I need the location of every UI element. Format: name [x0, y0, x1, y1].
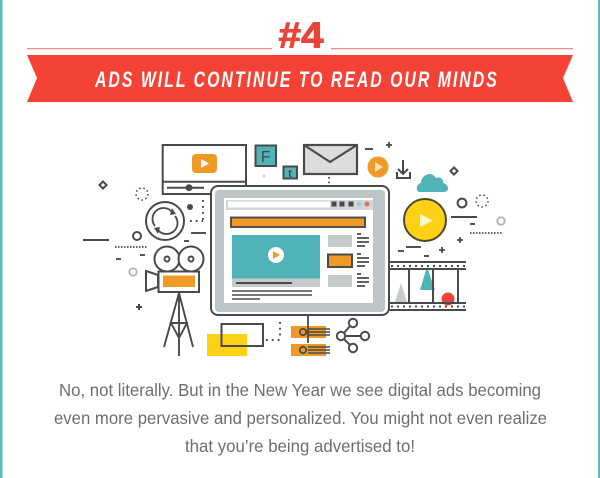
sync icon — [146, 202, 184, 240]
sidebar thumbnails — [328, 234, 369, 287]
filmstrip — [389, 262, 466, 310]
icon: yellow play button — [404, 199, 446, 241]
banner title: ADS WILL CONTINUE TO READ OUR MINDS — [94, 69, 497, 93]
icon: orange play button — [368, 156, 388, 178]
body paragraph — [54, 380, 547, 456]
illustration: digital advertising — [83, 142, 505, 356]
icon: cloud — [417, 174, 448, 192]
icon: t tile: t — [288, 168, 292, 180]
monitor — [211, 186, 389, 315]
body paragraph: that you’re being advertised to! — [185, 436, 415, 456]
decorative marks right — [365, 142, 505, 256]
icon: F tile: F — [261, 149, 271, 166]
yellow block with outline rectangle — [207, 322, 281, 356]
body paragraph: No, not literally. But in the New Year we see digital ads becoming — [59, 380, 541, 400]
video player window — [163, 145, 246, 194]
movie camera on tripod — [146, 246, 204, 356]
org chart boxes — [291, 315, 330, 356]
icon: envelope — [304, 145, 357, 174]
decorative marks left — [83, 181, 206, 310]
icon: t tile — [284, 166, 297, 180]
browser toolbar — [226, 200, 373, 210]
icon: download — [397, 160, 410, 178]
icon: F tile — [256, 146, 276, 166]
icon: share network — [337, 319, 369, 352]
heading number: #4 — [278, 14, 324, 56]
text lines under video — [232, 291, 312, 299]
orange headline bar — [231, 218, 365, 227]
red ribbon banner — [27, 55, 573, 102]
body paragraph: even more pervasive and personalized. You might not even realize — [54, 408, 547, 428]
video panel — [232, 235, 320, 287]
